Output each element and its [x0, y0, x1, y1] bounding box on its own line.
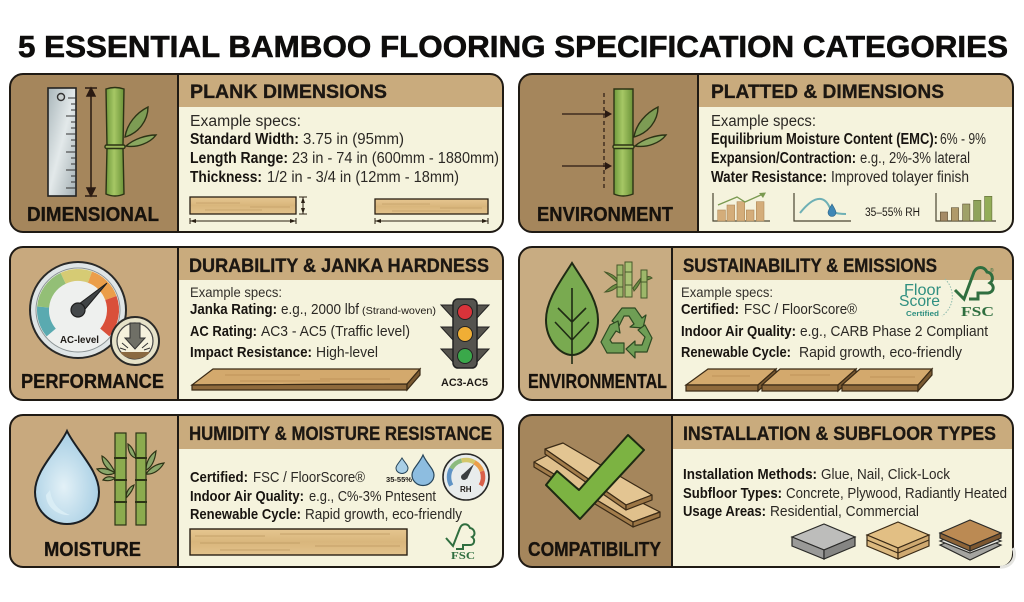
- text block: plank specs: [190, 113, 499, 186]
- text block: durability specs: [190, 284, 436, 361]
- text block: moisture specs: 6% - 9%: [940, 131, 986, 148]
- heading: plank dimensions: PLANK DIMENSIONS: [190, 82, 387, 103]
- logo: FSC: FSC: [961, 305, 994, 320]
- heading: humidity and moisture resistance: HUMIDITY & MOISTURE RESISTANCE: [189, 424, 492, 445]
- text block: installation specs: Usage Areas:: [683, 503, 766, 520]
- panel: compatibility: [519, 415, 1015, 567]
- heading: installation and subfloor types: INSTALLATION & SUBFLOOR TYPES: [683, 424, 996, 445]
- chart: rising bars: [936, 193, 996, 221]
- text block: plank specs: Standard Width:: [190, 131, 299, 148]
- plank diagram left: [190, 197, 307, 224]
- chart: humidity curve with drop: [794, 193, 851, 221]
- label: performance: PERFORMANCE: [21, 371, 164, 393]
- text block: durability specs: Impact Resistance:: [190, 344, 312, 361]
- icon: three planks: [686, 369, 932, 391]
- text block: sustainability specs: e.g., CARB Phase 2 Compliant: [800, 323, 989, 340]
- logo: FloorScore: Floor: [904, 282, 942, 299]
- text block: plank specs: 3.75 in (95mm): [303, 131, 404, 148]
- text block: sustainability specs: Certified:: [681, 301, 739, 318]
- logo: FSC: [955, 267, 994, 320]
- logo: FSC: ®: [990, 267, 994, 274]
- panel background: [519, 415, 1015, 567]
- icon: water drop: [35, 431, 99, 524]
- text block: durability specs: AC3 - AC5 (Traffic level): [261, 323, 410, 340]
- plank diagram right: [375, 199, 488, 224]
- text block: moisture specs: [190, 469, 462, 523]
- text block: sustainability specs: Renewable Cycle:: [681, 344, 791, 361]
- icon: check mark: [546, 435, 644, 519]
- panel: moisture: [10, 415, 503, 567]
- heading: platted and dimensions: PLATTED & DIMENSIONS: [711, 82, 944, 103]
- logo: FSC small: [446, 524, 475, 562]
- icon: AC-level gauge: [30, 262, 126, 358]
- icon: traffic light: [441, 299, 489, 368]
- icon: bamboo stalk: [105, 88, 156, 196]
- text block: moisture specs: Renewable Cycle:: [190, 506, 301, 523]
- icon: leaf: [546, 263, 598, 364]
- label: dimensional: DIMENSIONAL: [27, 204, 159, 226]
- icon: radiant heated tile: [940, 520, 1001, 560]
- icon: plywood tile: [867, 522, 929, 559]
- label: environment: ENVIRONMENT: [537, 204, 673, 226]
- text block: installation specs: Subfloor Types:: [683, 485, 782, 502]
- logo: FloorScore: Certified: [906, 309, 939, 318]
- text block: moisture specs: Example specs:: [711, 113, 816, 130]
- icon: RH gauge: RH: [460, 485, 472, 494]
- icon: small water drops: [386, 455, 434, 486]
- icon: bamboo pair: [97, 433, 164, 525]
- icon: bamboo cluster: [605, 262, 652, 298]
- icon: ruler: [48, 88, 76, 196]
- icon: dashed line and arrows: [562, 93, 612, 190]
- panel background: [10, 247, 503, 400]
- text block: moisture specs: Certified:: [190, 469, 248, 486]
- text block: sustainability specs: [681, 284, 989, 361]
- text block: durability specs: (Strand-woven): [362, 305, 436, 317]
- text block: durability specs: High-level: [316, 344, 378, 361]
- text block: sustainability specs: Rapid growth, eco-friendly: [799, 344, 962, 361]
- icon: AC-level gauge: AC-level: [60, 335, 99, 346]
- text block: installation specs: Installation Methods:: [683, 466, 817, 483]
- text block: moisture specs: Improved tolayer finish: [831, 169, 969, 186]
- panel background: [10, 415, 503, 567]
- logo: FloorScore: [899, 279, 952, 318]
- label: moisture: MOISTURE: [44, 539, 141, 561]
- chart label: relative humidity range: 35–55% RH: [865, 207, 920, 219]
- text block: plank specs: 23 in - 74 in (600mm - 1880mm): [292, 150, 499, 167]
- icon: concrete tile: [792, 524, 855, 559]
- icon: plank: [190, 529, 407, 555]
- icon: small water drops: 35-55%: [386, 477, 413, 484]
- text block: moisture specs: e.g., C%-3% Pntesent: [309, 488, 437, 505]
- panel: dimensional: [10, 74, 503, 232]
- text block: durability specs: Example specs:: [190, 284, 282, 300]
- heading: durability and janka hardness: DURABILITY & JANKA HARDNESS: [189, 256, 489, 277]
- text block: moisture specs: Indoor Air Quality:: [190, 488, 304, 505]
- text block: sustainability specs: FSC / FloorScore®: [744, 301, 857, 318]
- panel: performance: [10, 247, 503, 400]
- text block: installation specs: Residential, Commercial: [770, 503, 919, 520]
- logo: FloorScore: Score: [899, 293, 940, 310]
- text block: installation specs: Glue, Nail, Click-Lock: [821, 466, 950, 483]
- label: AC3-AC5: AC3-AC5: [441, 377, 488, 389]
- logo: FSC small: FSC: [451, 551, 475, 562]
- text block: moisture specs: [711, 113, 986, 186]
- panel: environmental: [519, 247, 1013, 400]
- icon: RH gauge: [443, 454, 489, 500]
- text block: sustainability specs: Indoor Air Quality:: [681, 323, 796, 340]
- text block: sustainability specs: Example specs:: [681, 284, 773, 300]
- label: environmental: ENVIRONMENTAL: [528, 371, 667, 393]
- text block: moisture specs: Equilibrium Moisture Content (EMC):: [711, 131, 938, 148]
- icon: recycling arrows: [601, 308, 652, 358]
- text block: plank specs: 1/2 in - 3/4 in (12mm - 18mm): [267, 169, 459, 186]
- text block: moisture specs: FSC / FloorScore®: [253, 469, 365, 486]
- text block: durability specs: AC Rating:: [190, 323, 257, 340]
- title: 5 ESSENTIAL BAMBOO FLOORING SPECIFICATION CATEGORIES: [18, 29, 1008, 64]
- icon: height arrow: [85, 88, 97, 196]
- panel background: [519, 247, 1013, 400]
- label: compatibility: COMPATIBILITY: [528, 539, 662, 561]
- icon: impact test: [111, 317, 159, 365]
- text block: plank specs: Example specs:: [190, 113, 301, 130]
- heading: sustainability and emissions: SUSTAINABILITY & EMISSIONS: [683, 256, 937, 277]
- chart: bars with trend line: [713, 192, 770, 221]
- icon: plank: [192, 369, 420, 390]
- text block: moisture specs: Expansion/Contraction:: [711, 150, 856, 167]
- text block: moisture specs: Rapid growth, eco-friendly: [305, 506, 462, 523]
- text block: installation specs: [683, 466, 1007, 520]
- text block: plank specs: Length Range:: [190, 150, 288, 167]
- icon: bamboo stalk: [613, 89, 666, 196]
- text block: plank specs: Thickness:: [190, 169, 262, 186]
- text block: durability specs: e.g., 2000 lbf: [281, 301, 360, 318]
- panel: environment: [519, 74, 1013, 232]
- icon: crossed planks: [534, 443, 660, 527]
- panel background: [519, 74, 1013, 232]
- text block: durability specs: Janka Rating:: [190, 301, 277, 318]
- text block: moisture specs: e.g., 2%-3% lateral: [860, 150, 970, 167]
- panel background: [10, 74, 503, 232]
- text block: moisture specs: Water Resistance:: [711, 169, 827, 186]
